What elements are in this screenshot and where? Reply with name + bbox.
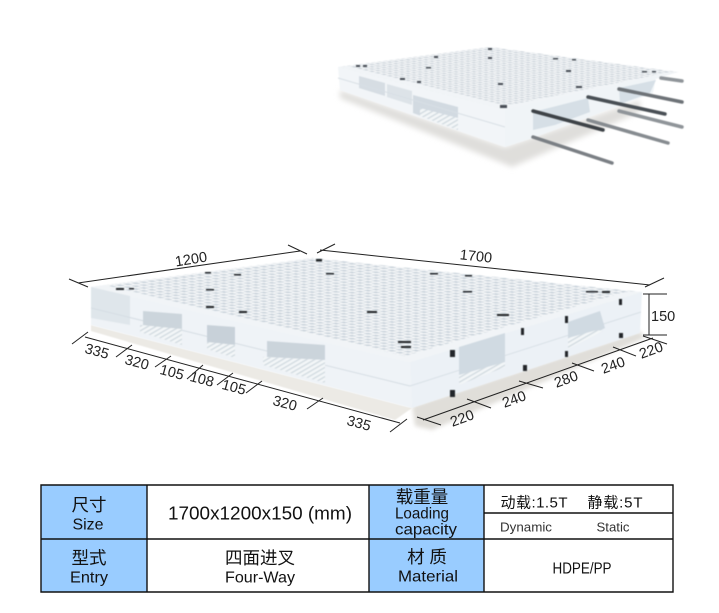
cell: size value: 1700x1200x150 (mm): [168, 502, 352, 524]
cell: dynamic and static load: Static: [596, 520, 630, 534]
cell: material value: HDPE/PP: [552, 560, 612, 578]
dimension chain: long side: 240: [599, 354, 627, 378]
right face with openings: [505, 77, 656, 147]
pallet body: [91, 258, 642, 408]
cell: loading capacity: [395, 487, 457, 538]
photo: top pallet with steel rods: [338, 47, 682, 167]
opening 3: [267, 341, 325, 360]
photo: main pallet: [91, 258, 645, 430]
cell: entry: [70, 548, 108, 586]
steel rods: [533, 78, 682, 163]
dimension chain: long side: [417, 336, 667, 431]
specification table: [41, 485, 673, 592]
top surface fixings: [356, 48, 656, 108]
dimension: 150: [643, 294, 675, 335]
dimension chain: long side: 280: [552, 368, 580, 392]
opening 2: [207, 325, 235, 345]
cell: size: Size: [72, 516, 104, 534]
cell: entry: 型式: [72, 548, 106, 568]
dimension chain: long side: 240: [500, 388, 528, 412]
cell: material: Material: [398, 568, 458, 586]
dimension chain: long side: 220: [637, 339, 665, 363]
cell: entry value: 四面进叉: [225, 548, 295, 568]
cell: entry value: [225, 548, 295, 586]
cell: dynamic and static load: 静载:5T: [588, 494, 642, 512]
left face with openings: [338, 67, 505, 147]
dimension chain: long side: 220: [448, 407, 476, 431]
cell: entry: Entry: [70, 570, 108, 586]
cell: dynamic and static load: 动载:1.5T: [500, 494, 568, 512]
dimension: 1700: 1700: [459, 247, 493, 267]
dimension: 1700: [317, 244, 664, 287]
table cell backgrounds: [41, 485, 484, 592]
pallet body: [338, 47, 678, 147]
floor shadow: [340, 90, 640, 167]
cell: material: [398, 547, 458, 586]
cell: entry value: Four-Way: [225, 570, 295, 586]
dimension chain: short side: 335: [345, 413, 373, 435]
dimension: 1200: 1200: [174, 250, 208, 270]
table grid lines: [41, 485, 673, 592]
cell: loading capacity: capacity: [395, 522, 457, 538]
dimension: 1200: [69, 245, 307, 287]
top surface grid: [91, 258, 642, 361]
cell: loading capacity: 载重量: [396, 487, 448, 507]
right face: [410, 292, 642, 408]
cell: dynamic and static load: Dynamic: [500, 520, 553, 534]
opening 1: [143, 311, 182, 330]
cell: size: [72, 495, 106, 534]
dimension chain: short side: 335: [83, 341, 111, 363]
right opening 2: [568, 311, 605, 348]
floor shadow: [91, 325, 645, 430]
dimension chain: short side: 105: [158, 362, 186, 384]
cell: dynamic and static load: [500, 494, 642, 534]
dimension chain: short side: 105: [220, 377, 248, 399]
right opening 1: [459, 333, 505, 385]
cell: size: 尺寸: [72, 495, 106, 515]
dimension chain: short side: [72, 332, 407, 435]
dimension chain: short side: 108: [188, 369, 216, 391]
left face: [91, 287, 412, 408]
dimension chain: short side: 320: [271, 393, 299, 415]
black fixings: [116, 259, 623, 397]
cell: material: 材 质: [407, 547, 447, 567]
dimension chain: short side: 320: [123, 352, 151, 374]
cell: loading capacity: Loading: [395, 506, 449, 522]
dimension: 150: 150: [651, 309, 675, 325]
